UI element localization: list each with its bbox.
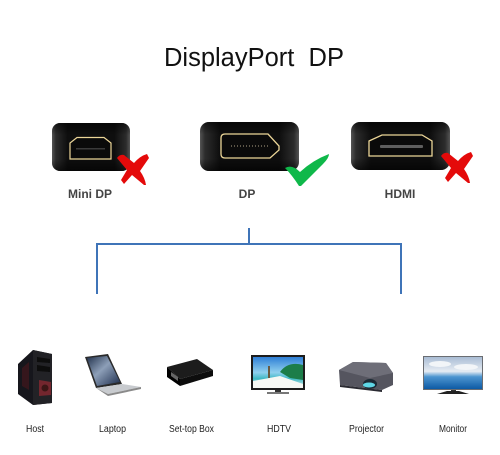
port pins: Mini DP xyxy=(76,148,105,150)
port socket: Mini DP xyxy=(70,138,111,159)
port socket: DP xyxy=(221,134,279,158)
label: Set-top Box: Set-top Box xyxy=(169,424,214,435)
icon: projector xyxy=(339,362,393,392)
icon: red cross xyxy=(441,152,473,183)
port socket: HDMI xyxy=(369,135,432,156)
label: Monitor: Monitor xyxy=(439,424,468,435)
panel: DP connector xyxy=(200,122,329,201)
icon: laptop xyxy=(85,354,141,396)
device: Host xyxy=(18,350,52,435)
blue connector bracket xyxy=(97,228,401,294)
port body: HDMI xyxy=(351,122,450,170)
title: DisplayPort DP xyxy=(164,44,344,72)
device: HDTV xyxy=(251,355,305,435)
device: Set-top Box xyxy=(167,359,214,435)
label: Host: Host xyxy=(26,424,44,435)
port body: Mini DP xyxy=(52,123,130,171)
label: DP: DP xyxy=(239,187,255,201)
icon: set-top box xyxy=(167,359,213,386)
icon: red cross xyxy=(117,154,149,185)
label: HDTV: HDTV xyxy=(267,424,291,435)
device: Projector xyxy=(339,362,393,435)
icon: television xyxy=(251,355,305,394)
icon: PC tower xyxy=(18,350,52,405)
panel: Mini DP connector xyxy=(52,123,149,201)
label: Mini DP: Mini DP xyxy=(68,187,112,201)
device: Monitor xyxy=(423,356,483,435)
port tongue: HDMI xyxy=(380,145,423,148)
icon: monitor xyxy=(423,356,483,394)
label: Projector: Projector xyxy=(349,424,385,435)
port body: DP xyxy=(200,122,299,171)
port pins: DP xyxy=(231,145,268,147)
device: Laptop xyxy=(85,354,141,435)
label: Laptop: Laptop xyxy=(99,424,126,435)
icon: green check xyxy=(285,154,329,186)
panel: HDMI connector xyxy=(351,122,473,201)
label: HDMI: HDMI xyxy=(385,187,415,201)
